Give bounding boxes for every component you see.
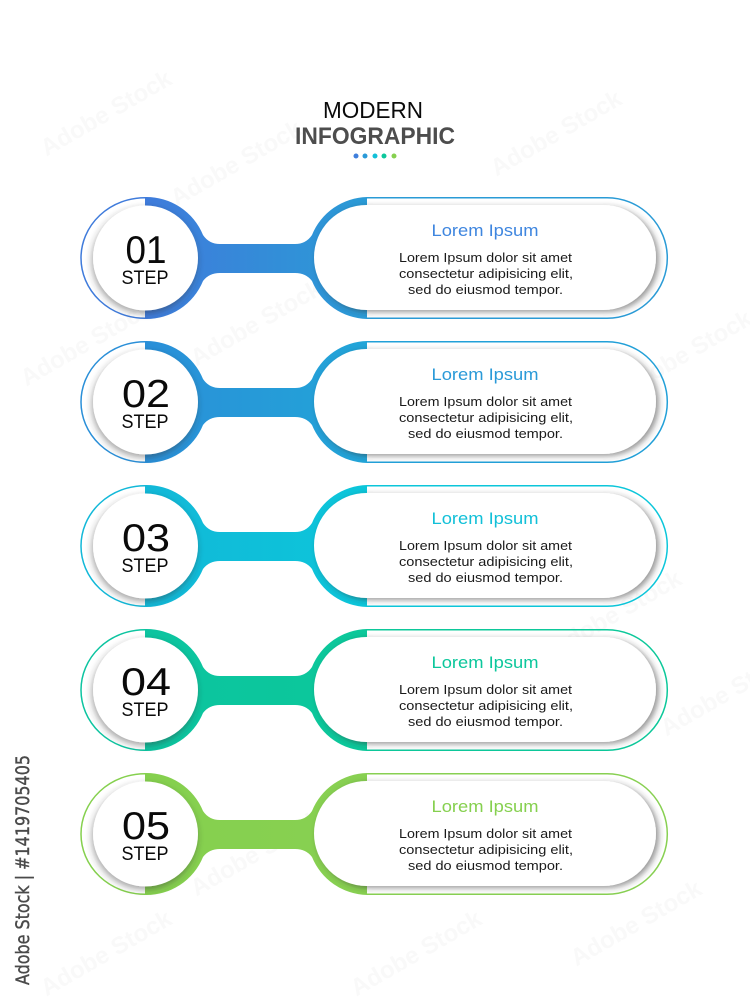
step 3 row xyxy=(81,485,667,607)
step 1 ring xyxy=(81,198,145,318)
step 4 row xyxy=(81,629,667,751)
step 3 body text: sed do eiusmod tempor. xyxy=(408,570,563,585)
title xyxy=(295,97,455,150)
step 5 body text: consectetur adipisicing elit, xyxy=(399,842,573,857)
step 2 body text xyxy=(399,394,573,441)
step 3 body text xyxy=(399,538,573,585)
step 2 pill outline xyxy=(367,342,667,462)
step 3 circle xyxy=(93,494,198,598)
step 5 heading: Lorem Ipsum xyxy=(432,797,538,816)
step 5 body text: Lorem Ipsum dolor sit amet xyxy=(399,826,572,841)
step 4 label: STEP xyxy=(122,700,168,721)
step 4 body text: sed do eiusmod tempor. xyxy=(408,714,563,729)
step 2 body text: sed do eiusmod tempor. xyxy=(408,426,563,441)
step 5 label: STEP xyxy=(122,844,168,865)
step 5 body text: sed do eiusmod tempor. xyxy=(408,858,563,873)
step 1 label: STEP xyxy=(122,268,168,289)
step 5 row xyxy=(81,773,667,895)
watermark: Adobe Stock xyxy=(36,905,177,1000)
step 2 label: STEP xyxy=(122,412,168,433)
step 4 text pill xyxy=(314,637,656,742)
step 3 number: 03 xyxy=(122,517,170,560)
step 5 connector xyxy=(145,773,367,895)
step 4 heading: Lorem Ipsum xyxy=(432,653,538,672)
step 1 pill outline xyxy=(367,198,667,318)
step 1 row xyxy=(81,197,667,319)
step 2 body text: Lorem Ipsum dolor sit amet xyxy=(399,394,572,409)
step 2 ring xyxy=(81,342,145,462)
step 1 body text: consectetur adipisicing elit, xyxy=(399,266,573,281)
title line: infographic: INFOGRAPHIC xyxy=(295,123,455,150)
step 1 circle xyxy=(93,206,198,310)
step 5 text pill xyxy=(314,781,656,886)
step 3 body text: Lorem Ipsum dolor sit amet xyxy=(399,538,572,553)
stock id side text: Adobe Stock | #1419705405 xyxy=(12,755,34,985)
watermark: Adobe Stock xyxy=(16,295,157,392)
step 5 circle xyxy=(93,782,198,886)
step 2 connector xyxy=(145,341,367,463)
watermark: Adobe Stock xyxy=(166,115,307,212)
watermark: Adobe Stock xyxy=(566,875,707,972)
step 4 circle xyxy=(93,638,198,742)
step 5 pill outline xyxy=(367,774,667,894)
step 1 text pill xyxy=(314,205,656,310)
watermark: Adobe Stock xyxy=(186,805,327,902)
title line: modern: MODERN xyxy=(323,97,423,123)
step 3 pill outline xyxy=(367,486,667,606)
watermark: Adobe Stock xyxy=(36,65,177,162)
step 3 text pill xyxy=(314,493,656,598)
step 2 row xyxy=(81,341,667,463)
step 3 connector xyxy=(145,485,367,607)
step 4 connector xyxy=(145,629,367,751)
step 4 body text: consectetur adipisicing elit, xyxy=(399,698,573,713)
step 1 heading: Lorem Ipsum xyxy=(432,221,538,240)
watermark: Adobe Stock xyxy=(346,905,487,1000)
step 1 body text xyxy=(399,250,573,297)
step 2 text pill xyxy=(314,349,656,454)
step 4 number: 04 xyxy=(121,661,171,704)
step 5 number: 05 xyxy=(122,805,170,848)
step 4 ring xyxy=(81,630,145,750)
watermark: Adobe Stock xyxy=(546,565,687,662)
step 4 body text xyxy=(399,682,573,729)
step 1 connector xyxy=(145,197,367,319)
step 2 body text: consectetur adipisicing elit, xyxy=(399,410,573,425)
step 4 body text: Lorem Ipsum dolor sit amet xyxy=(399,682,572,697)
step 2 number: 02 xyxy=(122,373,170,416)
step 4 pill outline xyxy=(367,630,667,750)
step 5 ring xyxy=(81,774,145,894)
watermark: Adobe Stock xyxy=(186,275,327,372)
step 3 body text: consectetur adipisicing elit, xyxy=(399,554,573,569)
step 2 circle xyxy=(93,350,198,454)
step 1 number: 01 xyxy=(126,229,166,272)
watermark: Adobe Stock xyxy=(486,85,627,182)
step 1 body text: sed do eiusmod tempor. xyxy=(408,282,563,297)
step 3 heading: Lorem Ipsum xyxy=(432,509,538,528)
title dots xyxy=(354,154,396,158)
step 2 heading: Lorem Ipsum xyxy=(432,365,538,384)
step 3 ring xyxy=(81,486,145,606)
step 5 body text xyxy=(399,826,573,873)
step 3 label: STEP xyxy=(122,556,168,577)
step 1 body text: Lorem Ipsum dolor sit amet xyxy=(399,250,572,265)
